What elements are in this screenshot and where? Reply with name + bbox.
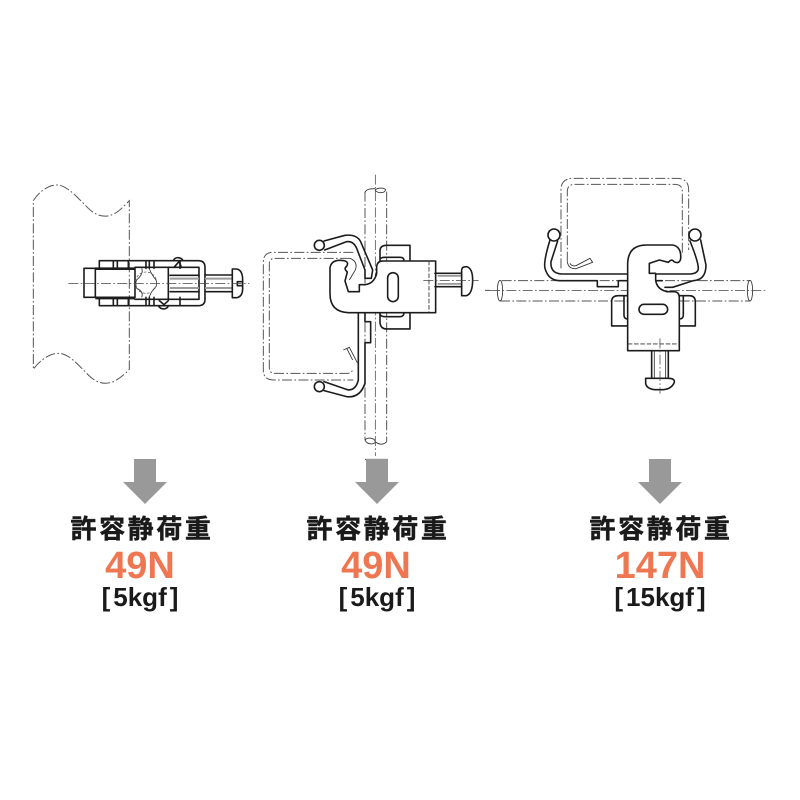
channel lip [343,258,357,363]
channel outline [561,178,689,268]
clamp frame [99,261,205,306]
channel outline [263,252,353,380]
value 1: 49N [105,545,175,587]
clamp body [628,245,681,351]
diagram: clamp on horizontal pipe with channel above [490,178,767,394]
load label 1 [70,514,214,612]
heading 3: 許容静荷重 [589,514,733,544]
spring clip right [657,240,706,287]
spring clip left [545,240,628,287]
kgf 3: [15kgf] [614,582,706,612]
pipe [490,280,767,301]
panel outline (dash-dot) [33,185,129,383]
body slot [639,304,668,314]
arrow 1 [123,459,167,504]
kgf 1: [5kgf] [102,582,178,612]
screw [170,275,232,292]
heading 2: 許容静荷重 [306,514,450,544]
pipe [365,175,387,459]
centre line [68,282,249,284]
clamp body [330,260,436,313]
arrow 3 [638,459,682,504]
diagram: clamp on vertical pipe with channel [263,175,490,459]
value 3: 147N [615,545,705,587]
tube section [136,268,157,297]
load label 3 [589,514,733,612]
channel lip [567,258,593,269]
channel end block [84,268,135,297]
wing plates [612,296,695,326]
value 2: 49N [341,545,411,587]
screw [652,351,668,378]
load label 2 [306,514,450,612]
wing plates [380,245,410,329]
kgf 2: [5kgf] [339,582,415,612]
spring clip bottom [324,313,371,397]
heading 1: 許容静荷重 [70,514,214,544]
diagram: clamp side view on panel [33,185,249,383]
arrow 2 [355,459,399,504]
body slot [388,273,398,302]
screw [435,273,462,287]
spring bumps [158,258,183,309]
spring clip top [324,235,373,278]
